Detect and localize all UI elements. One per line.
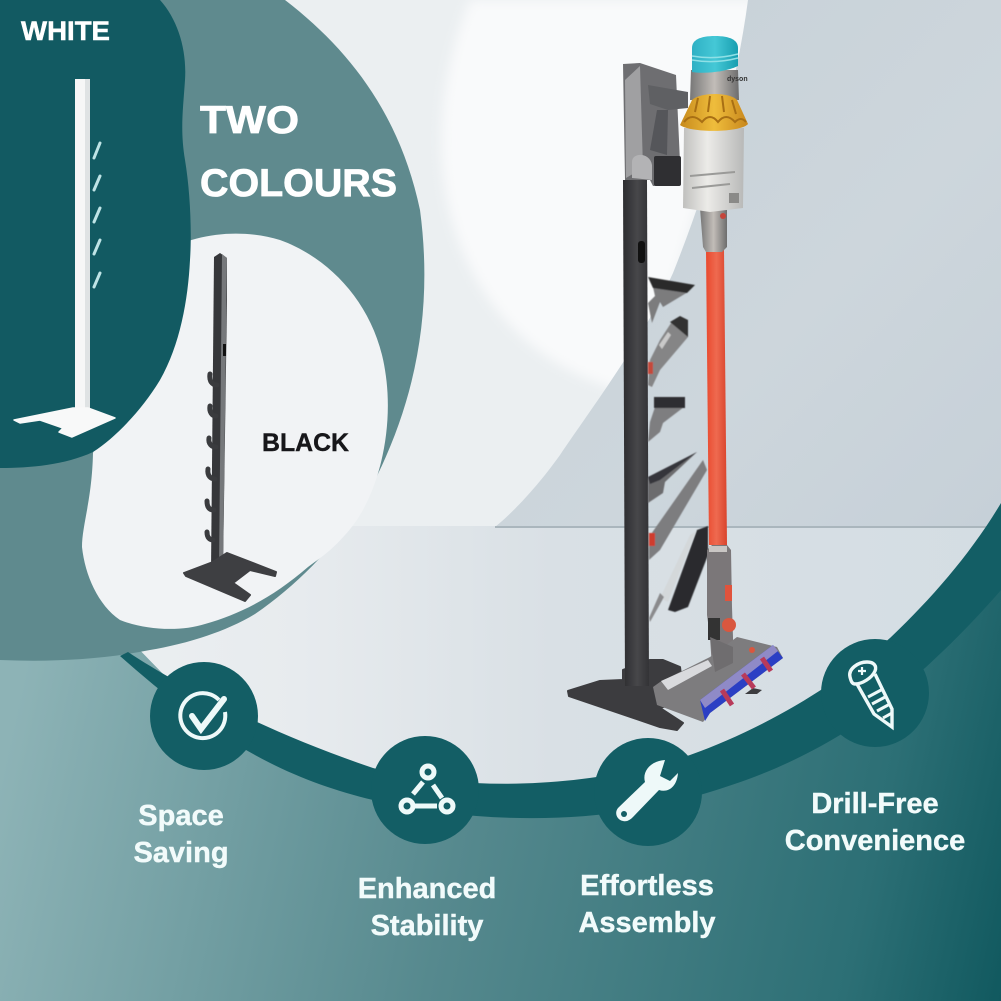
white stand	[14, 79, 115, 437]
heading: two colours: COLOURS	[200, 162, 397, 205]
accessory: long nozzle	[649, 460, 707, 560]
icon: triangle nodes	[401, 766, 453, 812]
label: enhanced stability: Stability	[371, 910, 483, 942]
vacuum stand post	[623, 180, 649, 686]
accessory: roller brush	[649, 526, 708, 622]
vacuum body	[690, 70, 748, 100]
heading: two colours: TWO	[200, 99, 299, 142]
panel: two colours blob	[0, 0, 424, 661]
label: black: BLACK	[262, 429, 349, 457]
vacuum cyclone yellow	[680, 94, 748, 131]
vacuum neck	[700, 208, 727, 252]
slot in post	[638, 241, 645, 263]
heading: white: WHITE	[21, 16, 110, 46]
label: space saving: Space	[138, 800, 224, 832]
feature: effortless assembly	[594, 738, 702, 846]
label: effortless assembly	[578, 870, 716, 939]
vacuum tube	[706, 250, 727, 545]
feature: enhanced stability	[371, 736, 479, 844]
label: space saving	[133, 800, 229, 869]
panel: black stand background	[82, 234, 388, 629]
black stand	[184, 253, 276, 601]
vacuum floor head	[653, 637, 783, 722]
icon: check in circle	[180, 693, 225, 738]
label: drill-free convenience: Drill-Free	[811, 788, 939, 820]
label: drill-free convenience: Convenience	[785, 825, 965, 857]
accessory: crevice	[648, 452, 697, 503]
accessories on stand	[648, 277, 708, 622]
heading: two colours	[200, 99, 397, 205]
label: enhanced stability: Enhanced	[358, 873, 496, 905]
vacuum bin	[683, 128, 744, 212]
accessory: upholstery tool	[648, 397, 685, 442]
feature: drill-free convenience	[821, 639, 929, 747]
panel: white stand background	[0, 0, 191, 468]
label: drill-free convenience	[785, 788, 965, 857]
vacuum top cyan	[692, 36, 738, 73]
accessory: mini brush	[648, 277, 695, 323]
vacuum stand base	[568, 660, 684, 730]
label: space saving: Saving	[133, 837, 229, 869]
icon: screw	[850, 662, 892, 727]
label: enhanced stability	[358, 873, 496, 942]
feature: space saving	[150, 662, 258, 770]
ribbon connecting features	[120, 503, 1001, 818]
vacuum lower wand	[707, 545, 736, 668]
lower gradient band background	[0, 585, 1001, 1001]
vacuum brand: dyson	[727, 76, 748, 83]
label: effortless assembly: Effortless	[580, 870, 714, 902]
accessory: soft tool	[648, 316, 688, 387]
vacuum dock	[623, 63, 688, 186]
label: effortless assembly: Assembly	[578, 907, 716, 939]
icon: wrench	[616, 760, 678, 821]
